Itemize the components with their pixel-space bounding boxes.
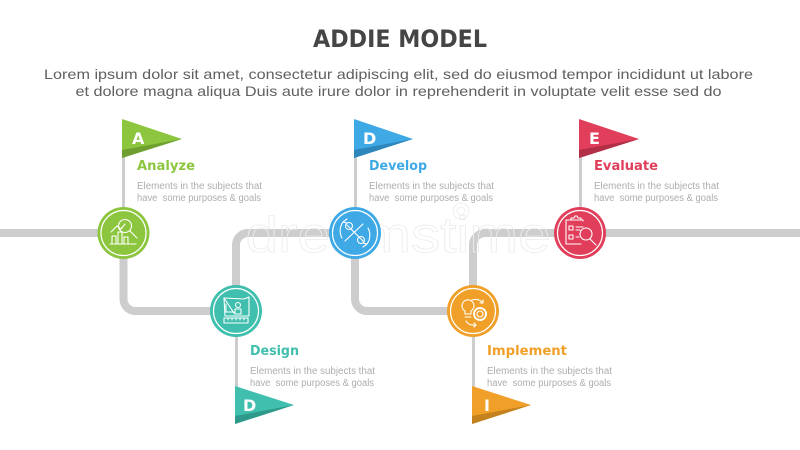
circle — [554, 207, 606, 259]
heading: Implement — [487, 344, 567, 359]
heading: Design — [250, 344, 299, 359]
flag pole — [579, 150, 582, 210]
flag pole — [354, 150, 357, 210]
intro text: Lorem ipsum dolor sit amet, consectetur adipiscing elit, sed do eiusmod tempor incididunt ut labore — [44, 66, 753, 82]
circle — [329, 207, 381, 259]
flag A: A — [132, 129, 145, 148]
flag pole — [472, 336, 475, 391]
description — [594, 181, 719, 204]
intro text: et dolore magna aliqua Duis aute irure dolor in reprehenderit in voluptate velit esse sed do — [76, 83, 722, 99]
flag D: D — [243, 396, 256, 415]
flag I: I — [484, 396, 490, 415]
description: Elements in the subjects that — [250, 366, 375, 377]
heading: Evaluate — [594, 159, 658, 174]
flag A — [122, 119, 182, 158]
description: have some purposes & goals — [369, 193, 493, 204]
description: have some purposes & goals — [487, 378, 611, 389]
description: have some purposes & goals — [594, 193, 718, 204]
title: ADDIE MODEL — [313, 25, 487, 53]
icon: crossed tools — [340, 219, 370, 247]
heading: Develop — [369, 159, 427, 174]
icon: blueprint and ruler — [224, 297, 249, 323]
description — [250, 366, 375, 389]
icon: chart with magnifier — [110, 220, 137, 244]
icon: bulb and gear — [462, 299, 486, 327]
description: have some purposes & goals — [137, 193, 261, 204]
step: Design — [210, 285, 375, 424]
description — [487, 366, 612, 389]
description: Elements in the subjects that — [137, 181, 262, 192]
road path — [0, 233, 800, 311]
flag E — [579, 119, 639, 158]
watermark: dreamstime — [246, 207, 550, 263]
intro text — [44, 66, 753, 99]
description: Elements in the subjects that — [487, 366, 612, 377]
flag pole — [235, 336, 238, 391]
circle — [210, 285, 262, 337]
step: Evaluate — [554, 119, 719, 259]
icon: clipboard and magnifier — [566, 216, 596, 245]
flag D — [235, 386, 294, 424]
flag pole — [122, 150, 125, 210]
step: Implement — [447, 285, 612, 424]
flag D: D — [363, 129, 376, 148]
description: Elements in the subjects that — [594, 181, 719, 192]
flag E: E — [589, 129, 600, 148]
description: Elements in the subjects that — [369, 181, 494, 192]
heading: Analyze — [137, 159, 195, 174]
step: Analyze — [98, 119, 262, 259]
circle — [447, 285, 499, 337]
flag D — [354, 119, 413, 158]
step: Develop — [329, 119, 494, 259]
flag I — [472, 386, 531, 424]
description — [137, 181, 262, 204]
description — [369, 181, 494, 204]
circle — [98, 207, 150, 259]
description: have some purposes & goals — [250, 378, 374, 389]
